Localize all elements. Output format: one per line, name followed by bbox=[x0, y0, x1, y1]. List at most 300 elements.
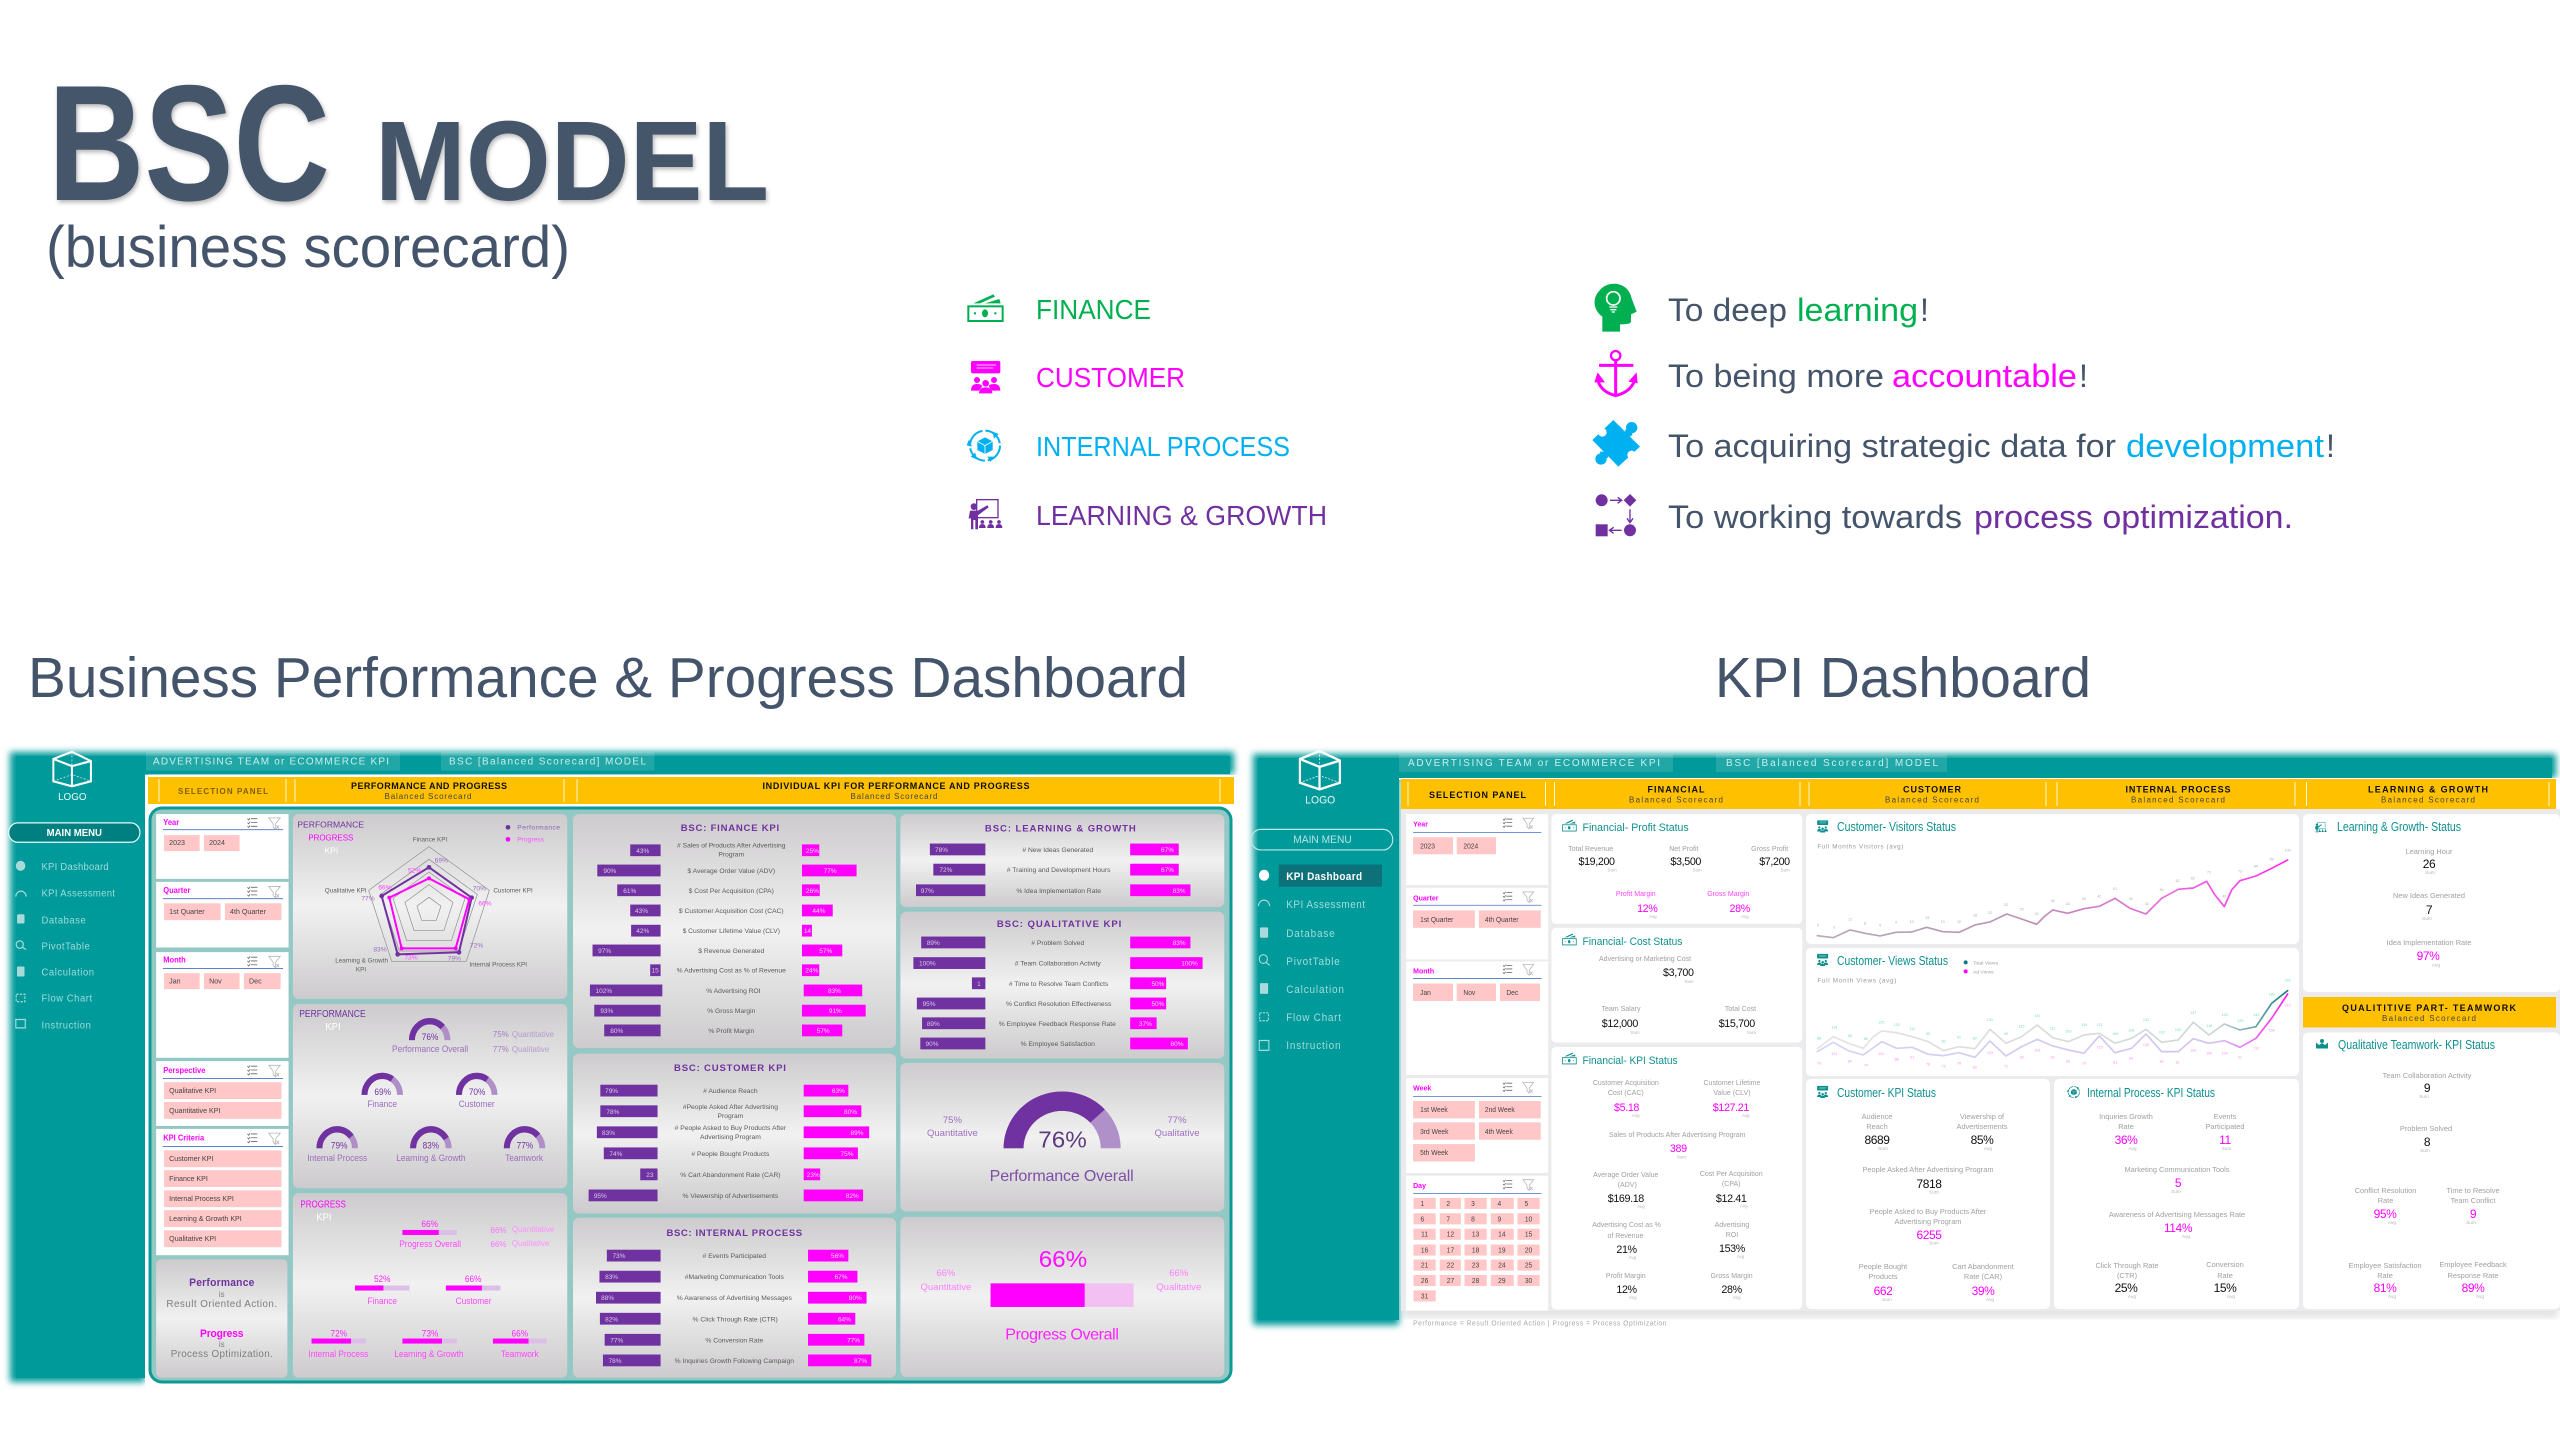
yellow section header: LEARNING & GROWTH bbox=[2368, 784, 2488, 794]
card: internal process KPI status: Click Through Rate bbox=[2095, 1261, 2159, 1270]
section header: qualitative teamwork: QUALITITIVE PART- TEAMWORK bbox=[2342, 1003, 2516, 1013]
card: financial KPI status: Avg bbox=[1737, 1254, 1745, 1259]
panel: finance KPI: % Advertising ROI bbox=[706, 988, 761, 995]
panel: performance overall gauge: 75% bbox=[943, 1114, 963, 1125]
card: internal process KPI status: Inquiries Growth bbox=[2099, 1112, 2153, 1121]
panel: learning and growth KPI: 97% bbox=[921, 888, 934, 895]
card: internal process KPI status: 114% bbox=[2164, 1221, 2193, 1235]
panel: learning and growth KPI: 67% bbox=[1161, 867, 1174, 874]
card: internal process KPI status: Avg bbox=[2227, 1294, 2235, 1300]
line chart: visitors: 32 bbox=[2004, 903, 2008, 907]
card: financial profit status: 28% bbox=[1730, 903, 1750, 915]
panel: learning and growth KPI: # New Ideas Generated bbox=[1022, 847, 1094, 854]
card: financial cost status: Total Cost bbox=[1725, 1004, 1756, 1013]
heading: business performance dashboard: Business Performance & Progress Dashboard bbox=[28, 646, 1188, 710]
line chart: total views and ad views: 71 bbox=[2004, 1065, 2008, 1069]
line chart: visitors: 36 bbox=[2051, 899, 2055, 903]
card: qualitative teamwork KPI status: Sum bbox=[2419, 1094, 2429, 1100]
panel: learning and growth KPI: BSC: LEARNING & GROWTH bbox=[985, 823, 1136, 834]
card: qualitative teamwork KPI status: 89% bbox=[2462, 1281, 2485, 1295]
panel: customer KPI: % Cart Abandonment Rate (CAR) bbox=[680, 1172, 781, 1179]
card: financial profit status bbox=[1551, 814, 1802, 924]
line chart: total views and ad views: 109 bbox=[2175, 1028, 2181, 1032]
line chart: total views and ad views: 92 bbox=[2051, 1056, 2055, 1060]
panel: progress bars: 66% bbox=[421, 1219, 438, 1229]
legend: four BSC perspectives bbox=[967, 294, 1327, 531]
slicer: day: 21 bbox=[1421, 1262, 1428, 1270]
axis labels: Finance KPI bbox=[413, 836, 447, 843]
line chart: total views and ad views: Total Views bbox=[1973, 961, 1999, 967]
panel: customer KPI: 78% bbox=[606, 1109, 620, 1116]
card: financial KPI status: Financial- KPI Status bbox=[1583, 1055, 1678, 1067]
panel: finance KPI: BSC: FINANCE KPI bbox=[681, 822, 779, 833]
panel: progress bars: Qualitative bbox=[512, 1239, 550, 1248]
line chart: total views and ad views: 120 bbox=[2143, 1043, 2149, 1047]
panel: finance KPI: # Sales of Products After Advertising bbox=[677, 843, 786, 850]
panel: finance KPI: 93% bbox=[600, 1008, 614, 1015]
panel: finance KPI: 90% bbox=[603, 868, 617, 875]
line chart: total views and ad views: 81 bbox=[2113, 1061, 2117, 1065]
card: financial cost status: Financial- Cost Status bbox=[1583, 936, 1683, 948]
card: internal process KPI status: Awareness of Advertising Messages Rate bbox=[2109, 1210, 2245, 1219]
line chart: total views and ad views: 147 bbox=[2190, 1011, 2196, 1015]
card: financial KPI status: Average Order Value bbox=[1593, 1170, 1658, 1179]
main teal frame bbox=[150, 808, 1231, 1382]
slicer: year: 2024 bbox=[1463, 844, 1478, 851]
sidebar, selection panel and financial cards bbox=[1251, 751, 1802, 1328]
panel: qualitative KPI: 100% bbox=[919, 961, 936, 968]
card: learning and growth status: Avg bbox=[2432, 962, 2440, 968]
goal: deep learning bbox=[1668, 292, 1929, 328]
radar grid bbox=[369, 847, 489, 961]
panel: progress bars: 66% bbox=[491, 1240, 506, 1249]
line chart: visitors: 33 bbox=[2066, 902, 2070, 906]
dashboard: KPI dashboard bbox=[1251, 751, 2560, 1328]
footnote: Performance = Result Oriented Action | Progress = Process Optimization bbox=[1413, 1320, 1667, 1328]
slicer: day: 6 bbox=[1421, 1216, 1424, 1224]
navigation menu: Instruction bbox=[1286, 1041, 1341, 1052]
card: financial cost status: Team Salary bbox=[1601, 1004, 1641, 1013]
panel: finance KPI: 43% bbox=[635, 908, 648, 915]
card: internal process KPI status: Avg bbox=[2182, 1234, 2190, 1240]
card: customer KPI status: 6255 bbox=[1916, 1228, 1942, 1242]
card: financial profit status: Sum bbox=[1608, 868, 1617, 873]
card: financial KPI status: Cost Per Acquisition bbox=[1700, 1169, 1763, 1178]
panel: finance KPI: 24% bbox=[805, 968, 819, 975]
slicer: day: 29 bbox=[1498, 1278, 1506, 1285]
card: qualitative teamwork KPI status: Employee Satisfaction bbox=[2348, 1261, 2422, 1270]
panel: performance gauges: Performance Overall bbox=[392, 1044, 468, 1054]
heading: KPI dashboard: KPI Dashboard bbox=[1715, 646, 2091, 710]
slicer: quarter: 1st Quarter bbox=[1420, 917, 1454, 924]
title: BSC Model: MODEL bbox=[375, 98, 769, 224]
panel: performance gauges: 69% bbox=[374, 1087, 391, 1097]
card: financial KPI status: Avg bbox=[1629, 1295, 1637, 1300]
top bar titles bbox=[1399, 754, 1947, 772]
panel: finance KPI: 57% bbox=[819, 948, 833, 955]
slicer: week: 1st Week bbox=[1420, 1107, 1448, 1114]
panel: performance gauges: PERFORMANCE bbox=[299, 1009, 366, 1020]
slicer: KPI criteria: Learning & Growth KPI bbox=[169, 1214, 242, 1223]
yellow section header: Balanced Scorecard bbox=[2131, 796, 2225, 804]
card: internal process KPI status: Internal Process- KPI Status bbox=[2087, 1085, 2215, 1100]
panel: customer KPI: 63% bbox=[832, 1088, 845, 1095]
line chart: total views and ad views: 82 bbox=[1942, 1040, 1946, 1044]
main menu pill bbox=[9, 823, 140, 842]
card: qualitative teamwork KPI status: 95% bbox=[2374, 1207, 2397, 1221]
card: qualitative teamwork KPI status: Employee Feedback bbox=[2439, 1260, 2507, 1269]
slicer: week: 3rd Week bbox=[1420, 1129, 1449, 1136]
slicer: week: 2nd Week bbox=[1485, 1107, 1515, 1114]
card: financial KPI status: Profit Margin bbox=[1606, 1271, 1646, 1280]
slicer: day: 4 bbox=[1497, 1201, 1501, 1208]
line chart: total views and ad views: 104 bbox=[2222, 1052, 2228, 1056]
line chart: visitors: 10 bbox=[1941, 920, 1945, 924]
line chart: total views and ad views: 131 bbox=[2143, 1018, 2149, 1022]
radar legend: Performance bbox=[517, 825, 560, 832]
card: internal process KPI status: Events bbox=[2214, 1112, 2237, 1121]
panel: qualitative KPI: # Team Collaboration Activity bbox=[1015, 961, 1101, 968]
panel: performance gauges: KPI bbox=[325, 1022, 341, 1033]
line chart: total views and ad views: 88 bbox=[1895, 1058, 1899, 1062]
panel: finance KPI: 61% bbox=[623, 888, 637, 895]
line chart: total views and ad views: 100 bbox=[2206, 1052, 2212, 1056]
panel: internal process KPI: 64% bbox=[838, 1316, 851, 1323]
slicer: day: 22 bbox=[1447, 1262, 1454, 1270]
slicer: year: 2023 bbox=[1420, 844, 1435, 851]
slicer: day: 26 bbox=[1421, 1278, 1428, 1285]
card: qualitative teamwork KPI status: Avg bbox=[2388, 1220, 2396, 1226]
panel: finance KPI: $ Customer Lifetime Value (CLV) bbox=[683, 928, 780, 935]
yellow section header: SELECTION PANEL bbox=[1429, 790, 1526, 800]
card: qualitative teamwork KPI status bbox=[2303, 1032, 2560, 1309]
goal: development: To acquiring strategic data for bbox=[1668, 428, 2116, 464]
panel: performance gauges: Qualitative bbox=[512, 1045, 550, 1054]
axis labels: Qualitative KPI bbox=[325, 888, 367, 895]
quote panel: Result Oriented Action. bbox=[166, 1299, 277, 1310]
card: financial KPI status: Sum bbox=[1677, 1155, 1686, 1160]
panel: internal process KPI: % Awareness of Advertising Messages bbox=[677, 1295, 793, 1302]
card: financial profit status: Gross Profit bbox=[1751, 844, 1788, 853]
panel: customer KPI: # People Asked to Buy Products After bbox=[675, 1125, 787, 1132]
section header: qualitative teamwork: Balanced Scorecard bbox=[2382, 1014, 2476, 1023]
card: financial KPI status: Value (CLV) bbox=[1713, 1088, 1751, 1097]
panel: finance KPI: 97% bbox=[598, 948, 611, 955]
card: financial KPI status: Avg bbox=[1740, 1203, 1748, 1208]
card: internal process KPI status: Rate bbox=[2118, 1122, 2134, 1131]
card: financial cost status bbox=[1551, 928, 1802, 1042]
card: learning and growth status: 7 bbox=[2426, 903, 2433, 917]
card: financial KPI status: Avg bbox=[1632, 1113, 1640, 1118]
icon: puzzle piece bbox=[1592, 420, 1640, 467]
active menu item: KPI Dashboard bbox=[1286, 872, 1362, 883]
line chart: total views and ad views: 89 bbox=[2129, 1057, 2133, 1061]
panel: performance gauges bbox=[293, 1004, 567, 1188]
active menu item bbox=[1279, 865, 1382, 887]
slicer: day: 7 bbox=[1446, 1216, 1450, 1224]
card: customer KPI status: 39% bbox=[1972, 1284, 1995, 1298]
card: internal process KPI status: 5 bbox=[2175, 1176, 2182, 1190]
card: financial KPI status: (CPA) bbox=[1722, 1179, 1741, 1188]
card: financial profit status: Avg bbox=[1741, 914, 1749, 919]
card: qualitative teamwork KPI status: 81% bbox=[2374, 1281, 2397, 1295]
yellow section header: SELECTION PANEL bbox=[178, 787, 268, 796]
slicer: day: 5 bbox=[1524, 1201, 1528, 1208]
slicer: KPI criteria: Customer KPI bbox=[169, 1154, 213, 1163]
main menu pill bbox=[1251, 829, 1393, 850]
chart titles: KPI bbox=[324, 845, 338, 855]
card: customer visitors status bbox=[1806, 814, 2299, 944]
panel: learning and growth KPI: 78% bbox=[935, 847, 948, 854]
line chart: total views and ad views: 109 bbox=[2190, 1049, 2196, 1053]
card: financial profit status: Avg bbox=[1649, 914, 1657, 919]
quote panel: is bbox=[219, 1340, 225, 1349]
slicer: day: 16 bbox=[1421, 1247, 1428, 1255]
line chart: total views and ad views: 129 bbox=[2237, 1019, 2243, 1023]
panel: progress bars: Learning & Growth bbox=[394, 1349, 464, 1359]
card: internal process KPI status: Conversion bbox=[2206, 1260, 2244, 1269]
line chart: visitors: 89 bbox=[2270, 858, 2274, 862]
slicer: KPI criteria: Finance KPI bbox=[169, 1174, 208, 1183]
line chart: visitors: 100 bbox=[2285, 849, 2291, 853]
panel: progress bars: Quantitative bbox=[512, 1225, 555, 1234]
slicer: quarter bbox=[1406, 888, 1548, 959]
panel: qualitative KPI: 83% bbox=[1173, 940, 1186, 947]
panel: qualitative KPI: # Time to Resolve Team Conflicts bbox=[1009, 981, 1109, 988]
line chart: total views and ad views: 111 bbox=[2050, 1027, 2055, 1031]
card: customer KPI status: 85% bbox=[1971, 1133, 1994, 1147]
slicer: day: 25 bbox=[1525, 1262, 1532, 1270]
panel: progress bars: 66% bbox=[491, 1226, 506, 1235]
panel: internal process KPI: % Conversion Rate bbox=[705, 1337, 764, 1344]
card: financial profit status: 12% bbox=[1637, 903, 1658, 915]
card: financial cost status: Advertising or Marketing Cost bbox=[1599, 954, 1691, 963]
top bar titles: BSC [Balanced Scorecard] MODEL bbox=[1726, 758, 1938, 769]
navigation menu: Flow Chart bbox=[1286, 1013, 1341, 1024]
radar legend: Progress bbox=[517, 837, 545, 844]
main menu pill: MAIN MENU bbox=[1293, 834, 1352, 846]
panel: internal process KPI: 87% bbox=[854, 1358, 867, 1365]
line chart: visitors: 9 bbox=[1895, 921, 1897, 925]
quote panel bbox=[156, 1259, 287, 1378]
panel: finance KPI: $ Cost Per Acquisition (CPA) bbox=[689, 888, 774, 895]
slicer: perspective: Qualitative KPI bbox=[169, 1086, 216, 1095]
panel: internal process KPI: BSC: INTERNAL PROCESS bbox=[666, 1227, 802, 1238]
value labels: 77% bbox=[361, 896, 375, 903]
panel: finance KPI: 25% bbox=[806, 848, 819, 855]
goal: accountable: accountable bbox=[1892, 358, 2077, 394]
card: financial profit status: Total Revenue bbox=[1568, 844, 1613, 853]
line chart: total views and ad views: 101 bbox=[1831, 1052, 1837, 1056]
slicer: KPI criteria: Qualitative KPI bbox=[169, 1234, 216, 1243]
card: internal process KPI status: (CTR) bbox=[2117, 1271, 2137, 1280]
title: BSC Model bbox=[48, 51, 769, 235]
panel: qualitative KPI bbox=[900, 912, 1224, 1059]
yellow section header: INTERNAL PROCESS bbox=[2126, 784, 2230, 794]
panel: performance gauges: Learning & Growth bbox=[396, 1153, 466, 1163]
slicer: quarter: 1st Quarter bbox=[169, 907, 205, 916]
line chart: total views and ad views: 78 bbox=[1957, 1062, 1961, 1066]
icon: logo cube bbox=[1300, 751, 1340, 789]
slicer: day: 1 bbox=[1421, 1201, 1424, 1208]
line chart: visitors: 33 bbox=[2145, 902, 2149, 906]
yellow section header: Balanced Scorecard bbox=[850, 792, 938, 801]
card: learning and growth status: 26 bbox=[2423, 857, 2436, 871]
card: customer KPI status: Sum bbox=[1882, 1297, 1892, 1303]
goal: deep learning: To deep bbox=[1668, 292, 1787, 328]
line chart: total views and ad views: 83 bbox=[2066, 1060, 2070, 1064]
panel: performance gauges: Internal Process bbox=[307, 1153, 367, 1163]
panel: customer KPI: 80% bbox=[844, 1109, 857, 1116]
goal: accountable: ! bbox=[2079, 358, 2088, 394]
panel: progress bars: 73% bbox=[422, 1328, 439, 1338]
slicer: day: 12 bbox=[1447, 1231, 1454, 1239]
navigation menu: Database bbox=[42, 915, 86, 927]
line chart: total views and ad views: Full Month Views (avg) bbox=[1817, 978, 1896, 985]
right KPI panels bbox=[573, 814, 1224, 1378]
card: financial cost status: Sum bbox=[1747, 1030, 1756, 1035]
card: qualitative teamwork KPI status: Conflict Resolution bbox=[2355, 1186, 2416, 1195]
panel: internal process KPI: #Marketing Communication Tools bbox=[685, 1274, 785, 1281]
slicer: day: 30 bbox=[1525, 1278, 1532, 1285]
line chart: visitors: 10 bbox=[1957, 920, 1961, 924]
card: customer KPI status: Sum bbox=[1929, 1240, 1939, 1246]
yellow section header: PERFORMANCE AND PROGRESS bbox=[351, 781, 507, 791]
card: financial profit status: Net Profit bbox=[1669, 844, 1699, 853]
panel: progress overall bar: 66% bbox=[936, 1267, 956, 1278]
line chart: total views and ad views: 99 bbox=[1926, 1032, 1930, 1036]
slicer: year: Year bbox=[163, 818, 179, 827]
card: qualitative teamwork KPI status: 8 bbox=[2424, 1135, 2431, 1149]
line chart: visitors: 50 bbox=[2160, 888, 2164, 892]
panel: performance gauges: Teamwork bbox=[505, 1153, 544, 1163]
slicer: quarter: Quarter bbox=[1413, 893, 1439, 903]
line chart: visitors: 65 bbox=[2191, 877, 2195, 881]
dashboard: business performance and progress bbox=[9, 752, 1243, 1395]
panel: progress bars: KPI bbox=[316, 1212, 332, 1224]
card: learning and growth status: 97% bbox=[2417, 949, 2440, 963]
value labels: 70% bbox=[473, 886, 486, 893]
panel: progress overall bar: Progress Overall bbox=[1005, 1327, 1119, 1343]
slicer: day: 3 bbox=[1471, 1201, 1475, 1208]
card: internal process KPI status: Avg bbox=[2128, 1146, 2137, 1152]
panel: internal process KPI: 83% bbox=[605, 1274, 618, 1281]
slicer: perspective: Quantitative KPI bbox=[169, 1106, 220, 1115]
panel: performance overall gauge: 76% bbox=[1038, 1127, 1087, 1153]
axis labels bbox=[325, 836, 533, 974]
line chart: visitors: 39 bbox=[2129, 897, 2133, 901]
panel: finance KPI: 44% bbox=[812, 908, 826, 915]
card: financial cost status: $3,700 bbox=[1663, 967, 1694, 979]
slicer: quarter: Quarter bbox=[163, 886, 190, 895]
slicer: day: 14 bbox=[1498, 1231, 1506, 1239]
quote panel: Performance bbox=[189, 1277, 254, 1289]
panel: finance KPI: % Gross Margin bbox=[707, 1008, 756, 1015]
slicer: perspective: Perspective bbox=[163, 1066, 206, 1075]
panel: internal process KPI: % Click Through Rate (CTR) bbox=[693, 1316, 778, 1323]
line chart: total views and ad views: 76 bbox=[1926, 1063, 1930, 1067]
panel: qualitative KPI: BSC: QUALITATIVE KPI bbox=[997, 918, 1121, 929]
progress series bbox=[387, 876, 471, 950]
top bar titles: ADVERTISING TEAM or ECOMMERCE KPI bbox=[153, 756, 389, 768]
card: internal process KPI status: 36% bbox=[2115, 1133, 2138, 1147]
panel: finance KPI: 83% bbox=[828, 988, 841, 995]
navigation menu bbox=[1258, 870, 1365, 1052]
card: qualitative teamwork KPI status: Rate bbox=[2378, 1196, 2393, 1205]
card: financial KPI status: (ADV) bbox=[1618, 1180, 1637, 1189]
panel: progress bars: Teamwork bbox=[501, 1349, 539, 1359]
icon: logo cube bbox=[53, 752, 91, 786]
subtitle: (business scorecard) bbox=[46, 215, 570, 280]
line chart: total views and ad views: 118 bbox=[2206, 1024, 2212, 1028]
panel: internal process KPI: 73% bbox=[612, 1253, 626, 1260]
panel: progress overall bar bbox=[900, 1217, 1224, 1377]
panel: customer KPI: 83% bbox=[602, 1130, 615, 1137]
slicer: year bbox=[156, 814, 289, 879]
panel: finance KPI: 43% bbox=[636, 848, 650, 855]
panel: finance KPI: Program bbox=[718, 852, 745, 859]
navigation menu: Instruction bbox=[42, 1020, 91, 1031]
card: internal process KPI status: Avg bbox=[2128, 1294, 2136, 1300]
navigation menu: PivotTable bbox=[1286, 957, 1340, 968]
panel: learning and growth KPI bbox=[900, 814, 1224, 907]
yellow section header: Balanced Scorecard bbox=[2381, 796, 2475, 804]
icon: internal process cycle bbox=[967, 431, 1000, 462]
card: customer KPI status: Advertising Program bbox=[1895, 1217, 1961, 1226]
goal: process optimization: To working towards bbox=[1668, 499, 1962, 535]
card: qualitative teamwork KPI status: Avg bbox=[2388, 1294, 2396, 1300]
card: financial KPI status: ROI bbox=[1726, 1230, 1738, 1239]
goal: deep learning: learning bbox=[1797, 292, 1918, 328]
panel: performance gauges: 77% bbox=[517, 1140, 534, 1151]
card: customer KPI status: Sum bbox=[1878, 1146, 1888, 1152]
card: learning and growth status bbox=[2303, 814, 2560, 992]
slicer: month: Nov bbox=[1463, 990, 1476, 997]
line chart: total views and ad views: 106 bbox=[2128, 1029, 2134, 1033]
panel: finance KPI: 102% bbox=[596, 988, 612, 995]
slicer: week: Week bbox=[1413, 1083, 1432, 1093]
card: financial KPI status: Avg bbox=[1742, 1113, 1750, 1118]
panel: finance KPI: $ Revenue Generated bbox=[698, 948, 765, 955]
line chart: total views and ad views: 131 bbox=[1987, 1018, 1993, 1022]
panel: finance KPI: 57% bbox=[817, 1028, 830, 1035]
slicer: month: Jan bbox=[169, 976, 181, 985]
line chart: total views and ad views: 102 bbox=[2159, 1031, 2165, 1035]
panel: customer KPI: 75% bbox=[841, 1151, 854, 1158]
line chart: total views and ad views: 72 bbox=[1942, 1065, 1946, 1069]
axis labels: Customer KPI bbox=[493, 888, 533, 895]
card: customer KPI status: 7818 bbox=[1916, 1177, 1942, 1191]
card: learning and growth status: New Ideas Generated bbox=[2393, 891, 2465, 900]
slicer: day: Day bbox=[1413, 1181, 1426, 1190]
card: financial cost status: $12,000 bbox=[1602, 1018, 1638, 1030]
panel: progress bars bbox=[293, 1193, 567, 1378]
card: internal process KPI status: Sum bbox=[2222, 1146, 2231, 1152]
panel: performance overall gauge: Performance Overall bbox=[990, 1168, 1134, 1185]
line chart: visitors: 8 bbox=[1864, 922, 1866, 926]
slicer: quarter: 4th Quarter bbox=[230, 907, 266, 916]
axis labels: KPI bbox=[356, 967, 366, 974]
card: learning and growth status: Idea Implementation Rate bbox=[2387, 938, 2471, 947]
card: customer KPI status: Advertisements bbox=[1957, 1122, 2008, 1131]
slicer: day: 2 bbox=[1446, 1201, 1450, 1208]
card: qualitative teamwork KPI status: Team Collaboration Activity bbox=[2383, 1071, 2472, 1080]
card: financial KPI status: Sales of Products After Advertising Program bbox=[1609, 1130, 1746, 1139]
slicer: year: 2023 bbox=[169, 838, 185, 847]
panel: finance KPI: 15 bbox=[651, 968, 659, 975]
panel: learning and growth KPI: % Idea Implementation Rate bbox=[1016, 888, 1101, 895]
slicer: year bbox=[1406, 814, 1548, 885]
